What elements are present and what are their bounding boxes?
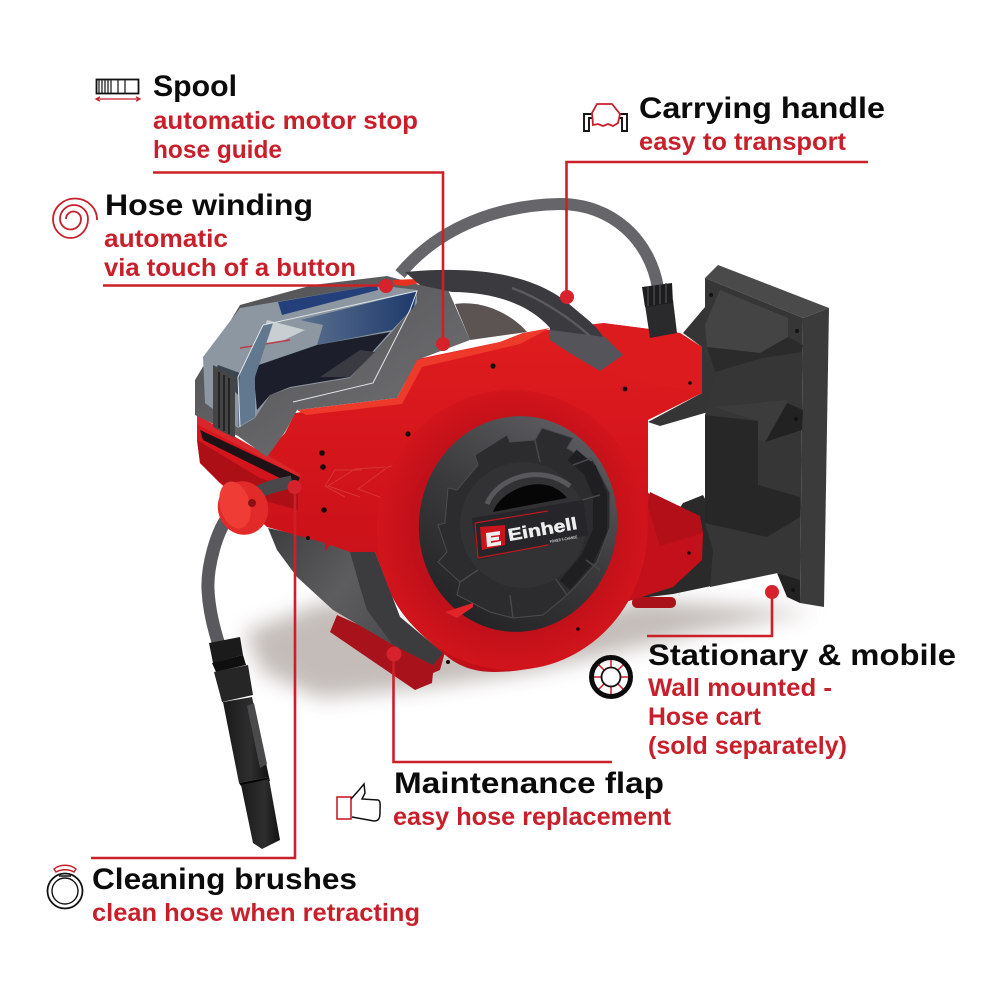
screw holes	[306, 363, 692, 664]
heading: carrying handle: Carrying handle	[639, 92, 885, 125]
body highlight band	[297, 328, 550, 415]
main red body	[197, 323, 702, 672]
callout: maintenance flap	[337, 646, 672, 831]
heading: cleaning brushes: Cleaning brushes	[92, 863, 357, 896]
description: stationary and mobile	[648, 674, 847, 760]
leader line: hose winding	[103, 279, 393, 293]
icon: brush ring	[48, 865, 82, 908]
shadow under product	[245, 600, 815, 698]
description: hose winding	[104, 225, 356, 282]
callout: carrying handle	[560, 92, 885, 304]
wall bracket	[632, 265, 829, 608]
heading: stationary and mobile: Stationary & mobile	[648, 639, 956, 672]
description: stationary and mobile: (sold separately)	[648, 732, 847, 760]
lower right red block	[600, 493, 703, 608]
front slot and lip	[197, 415, 301, 510]
hose connector	[642, 283, 677, 338]
description: spool	[153, 107, 418, 164]
chevron embossing	[325, 460, 420, 499]
description: carrying handle: easy to transport	[639, 128, 847, 156]
spray nozzle	[209, 637, 280, 849]
leader line: cleaning brushes	[91, 480, 302, 858]
leader line: carrying handle	[560, 162, 868, 304]
grey drum bowl	[268, 528, 443, 665]
description: cleaning brushes: clean hose when retracting	[92, 899, 420, 927]
drum behind handle	[455, 303, 527, 340]
nameplate	[472, 500, 588, 560]
brand name: Einhell	[506, 514, 579, 545]
transparent cover	[203, 285, 417, 428]
heading: spool: Spool	[153, 70, 237, 103]
disc and Einhell label	[405, 403, 631, 645]
bowl dark strip	[350, 552, 443, 665]
leader line: maintenance flap	[386, 646, 612, 762]
red ring around disc	[377, 390, 647, 670]
description: spool: automatic motor stop	[153, 107, 418, 135]
callout: stationary and mobile	[592, 585, 956, 760]
callout: hose winding	[53, 189, 393, 293]
icon: spiral	[53, 198, 97, 238]
description: hose winding: via touch of a button	[104, 254, 356, 282]
leader line: stationary and mobile	[647, 585, 779, 636]
hose ball stop	[210, 474, 276, 542]
icon: wheel	[592, 658, 630, 696]
icon: spool	[96, 80, 140, 101]
grey hood	[195, 276, 470, 457]
carrying handle	[405, 270, 623, 371]
callout: spool	[96, 70, 450, 351]
description: stationary and mobile: Hose cart	[648, 703, 762, 731]
leader line: spool	[153, 172, 450, 351]
upper supply hose	[400, 204, 658, 288]
icon: thumbs up	[337, 784, 380, 821]
icon: hand on handle	[584, 104, 627, 131]
heading: hose winding: Hose winding	[105, 189, 313, 222]
hood button	[392, 279, 420, 286]
heading: maintenance flap: Maintenance flap	[394, 767, 664, 800]
description: maintenance flap: easy hose replacement	[393, 803, 672, 831]
product: hose reel	[195, 204, 829, 849]
nozzle hose	[238, 482, 292, 510]
brand sub-line: POWER X-CHANGE	[549, 534, 578, 544]
front clip	[213, 365, 235, 438]
maintenance flap	[330, 615, 445, 690]
description: hose winding: automatic	[104, 225, 228, 253]
callout: cleaning brushes	[48, 480, 420, 927]
description: spool: hose guide	[153, 136, 282, 164]
description: stationary and mobile: Wall mounted -	[648, 674, 832, 702]
